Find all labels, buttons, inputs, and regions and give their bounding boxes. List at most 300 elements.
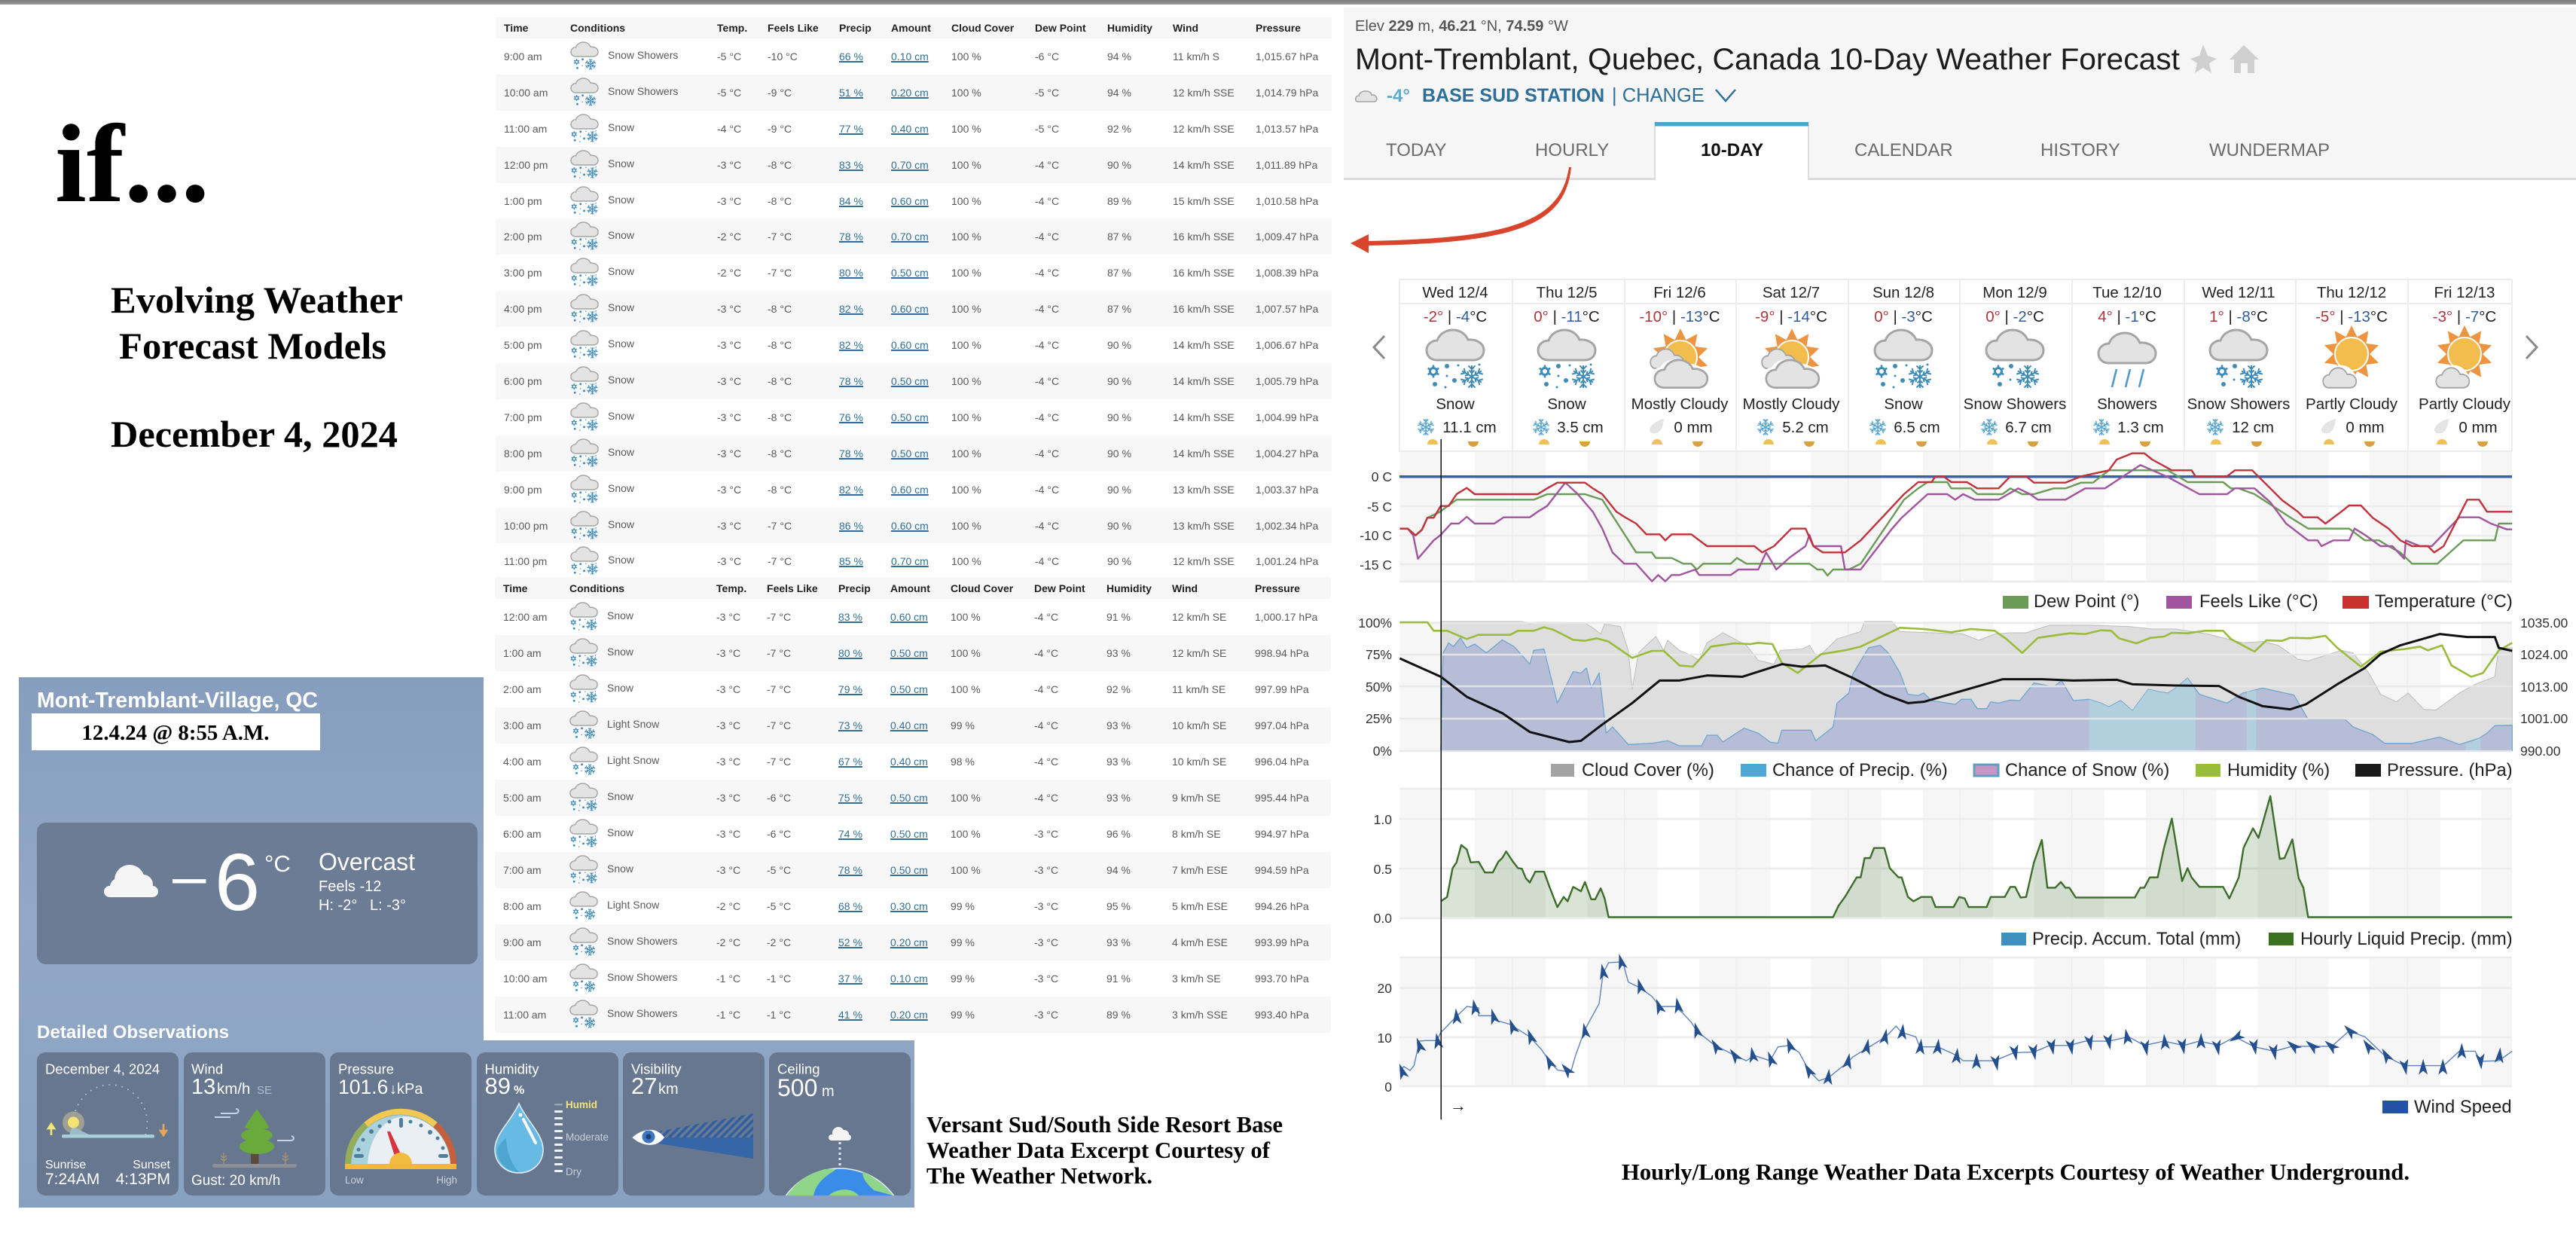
table header row: 85 % (839, 555, 863, 567)
chart: cloud cover, precipitation, humidity and pressure: 25% (1366, 711, 1392, 726)
table header row: 1,002.34 hPa (1256, 520, 1318, 532)
table header row: 90 % (1107, 339, 1131, 351)
table header row: 74 % (838, 828, 862, 840)
icon: earth with cloud ceiling (785, 1127, 895, 1196)
table header row: Snow Showers (607, 971, 677, 983)
table header row: 12 km/h SSE (1173, 123, 1235, 135)
table header row: 11:00 am (504, 123, 547, 135)
table header row: 16 km/h SSE (1173, 267, 1235, 279)
day: Wed 12/4: 11.1 cm (1442, 419, 1497, 436)
day: Fri 12/6: 0 mm (1674, 419, 1713, 436)
table header row: -5 °C (717, 87, 741, 99)
table header row: Snow (607, 863, 633, 875)
table header row: 997.99 hPa (1255, 683, 1309, 695)
icon: current wind arrow: → (1450, 1096, 1467, 1115)
table header row: 0.60 cm (891, 339, 929, 351)
day: Wed 12/4: -2° | -4°C (1424, 308, 1487, 325)
table header row: Pressure (1256, 22, 1301, 34)
table header row: -3 °C (717, 484, 741, 496)
card: wind: SE (257, 1084, 272, 1097)
humidity scale: Humid (566, 1099, 597, 1110)
table header row: 7:00 pm (504, 411, 542, 423)
series: wind direction arrows (1395, 953, 2504, 1085)
table header row: 14 km/h SSE (1173, 375, 1235, 387)
series: wind speed line (1399, 962, 2512, 1081)
series: pressure (1399, 634, 2512, 742)
table header row: -4 °C (1035, 555, 1059, 567)
table header row: 3 km/h SE (1172, 973, 1221, 985)
table header row: 5:00 pm (504, 339, 542, 351)
table header row: 100 % (951, 303, 981, 315)
card: wind: 13 (191, 1075, 215, 1099)
humidity scale (554, 1099, 609, 1177)
panel: current conditions, The Weather Network (19, 677, 914, 1208)
table header row: 73 % (838, 719, 862, 731)
table header row: 3:00 pm (504, 267, 542, 279)
table header row: 99 % (951, 900, 975, 912)
table header row: -8 °C (768, 159, 792, 171)
table header row: -5 °C (1035, 87, 1059, 99)
table header row: -1 °C (716, 1009, 740, 1021)
card: wind: km/h (217, 1080, 250, 1098)
table header row: 100 % (951, 267, 981, 279)
table header row: -4 °C (1035, 267, 1059, 279)
table header row: -2 °C (717, 231, 741, 243)
table header row: 11 km/h S (1173, 50, 1219, 63)
humidity scale: Moderate (566, 1131, 609, 1143)
table header row: 13 km/h SSE (1173, 520, 1235, 532)
chart: cloud cover, precipitation, humidity and pressure: 1024.00 (2520, 647, 2568, 662)
day: Mon 12/9: 0° | -2°C (1985, 308, 2044, 325)
table header row (504, 22, 1318, 575)
series: feels like (1399, 465, 2512, 582)
table header row: -7 °C (767, 611, 791, 623)
table header row: 100 % (951, 792, 981, 804)
table header row: -8 °C (768, 375, 792, 387)
day: Mon 12/9: Snow Showers (1964, 395, 2066, 413)
table header row: 91 % (1106, 611, 1131, 623)
table header row: Snow (608, 193, 634, 205)
table header row: 11:00 pm (504, 555, 547, 567)
card: sunrise and sunset: Sunset (133, 1159, 171, 1171)
table header row: 0.70 cm (891, 159, 929, 171)
table header row: -8 °C (768, 339, 792, 351)
table header row: -4 °C (717, 123, 741, 135)
day: Thu 12/12: -5° | -13°C (2315, 308, 2388, 325)
table header row: -3 °C (716, 828, 740, 840)
current time marker line (1440, 439, 1442, 1119)
chart: hourly liquid precipitation: 1.0 (1374, 812, 1392, 827)
table header row: 89 % (1106, 1009, 1131, 1021)
heading: Evolving Weather Forecast Models: Forecast Models (119, 325, 386, 367)
table header row: Snow (608, 410, 634, 422)
caption: Weather Underground credit: Hourly/Long Range Weather Data Excerpts Courtesy of Weather Underground. (1622, 1159, 2410, 1185)
arrow: previous day (1374, 336, 1384, 359)
table header row: -8 °C (768, 303, 792, 315)
table header row: 100 % (951, 828, 981, 840)
day: Wed 12/4: Wed 12/4 (1422, 284, 1488, 301)
series: dew point (1399, 470, 2512, 576)
chart: wind speed: 0 (1384, 1080, 1392, 1095)
table header row: 1,014.79 hPa (1256, 87, 1318, 99)
table header row: 100 % (951, 87, 981, 99)
table header row: 93 % (1106, 792, 1131, 804)
table header row: 90 % (1107, 375, 1131, 387)
table header row: 12 km/h SE (1172, 611, 1226, 623)
table header row: 90 % (1107, 555, 1131, 567)
table header row: 1,003.37 hPa (1256, 484, 1318, 496)
table header row: 1,006.67 hPa (1256, 339, 1318, 351)
table header row: -6 °C (767, 828, 791, 840)
table header row: -4 °C (1035, 375, 1059, 387)
table header row: 82 % (839, 484, 863, 496)
table header row: -3 °C (717, 303, 741, 315)
card: humidity: % (514, 1084, 524, 1097)
table header row: Snow (607, 826, 633, 838)
table header row: 100 % (951, 520, 981, 532)
table header row: Snow (607, 682, 633, 694)
table header row: -4 °C (1034, 719, 1058, 731)
table header row: 0.50 cm (890, 647, 928, 659)
table header row: -3 °C (716, 683, 740, 695)
table header row: 13 km/h SSE (1173, 484, 1235, 496)
heading: Evolving Weather Forecast Models: Evolving Weather (111, 279, 403, 321)
table header row: 1,000.17 hPa (1255, 611, 1317, 623)
table header row: 2:00 pm (504, 231, 542, 243)
table header row: Snow Showers (608, 85, 678, 97)
table header row: 99 % (951, 719, 975, 731)
table header row: -5 °C (767, 900, 791, 912)
table header row: -4 °C (1035, 194, 1059, 206)
navigation tabs: TODAY (1386, 140, 1446, 160)
table header row: 67 % (838, 756, 862, 768)
table header row: 4:00 pm (504, 303, 542, 315)
table header row: 9:00 am (503, 936, 542, 948)
table header row: 100 % (951, 555, 981, 567)
table header row: 79 % (838, 683, 862, 695)
table header row: 0.20 cm (890, 936, 928, 948)
table header row: 3 km/h SSE (1172, 1009, 1228, 1021)
table header row: 0.70 cm (891, 231, 929, 243)
table header row: -3 °C (716, 611, 740, 623)
table header row: 10:00 pm (504, 520, 548, 532)
chart: temperature, feels like and dew point: 0 C (1372, 469, 1392, 484)
table header row: 1:00 pm (504, 194, 542, 206)
table header row: 87 % (1107, 303, 1131, 315)
day: Sun 12/8 (1869, 284, 1940, 447)
table header row: -3 °C (716, 756, 740, 768)
table header row: 93 % (1106, 756, 1131, 768)
table header row: 6:00 pm (504, 375, 542, 387)
title: if...: if... (55, 102, 209, 226)
table header row: -5 °C (1035, 123, 1059, 135)
table header row: -4 °C (1034, 792, 1058, 804)
card: pressure: High (436, 1174, 457, 1186)
table header row: 14 km/h SSE (1173, 447, 1235, 460)
day: Sat 12/7 (1743, 284, 1840, 447)
table header row: 10 km/h SE (1172, 719, 1226, 731)
table header row: 10:00 am (504, 87, 548, 99)
table header row: 83 % (838, 611, 862, 623)
table header row: 92 % (1107, 123, 1131, 135)
top grey strip (0, 0, 2576, 5)
day: Thu 12/12: 0 mm (2346, 419, 2385, 436)
table header row: 78 % (839, 375, 863, 387)
station name: Mont-Tremblant-Village, QC (37, 689, 318, 713)
table header row: -3 °C (716, 792, 740, 804)
table header row: -2 °C (767, 936, 791, 948)
icon: pressure gauge (345, 1112, 456, 1169)
table header row: 9:00 am (504, 50, 542, 63)
day: Thu 12/12 (2306, 284, 2398, 447)
legend: cloud and pressure chart: Cloud Cover (%) (1582, 760, 1714, 780)
card: pressure: ↓kPa (389, 1081, 423, 1098)
navigation tabs: HISTORY (2040, 140, 2120, 160)
table header row: 9:00 pm (504, 484, 542, 496)
table header row: -4 °C (1035, 484, 1059, 496)
table header row: 1,001.24 hPa (1256, 555, 1318, 567)
legend: precipitation chart: Hourly Liquid Precip. (mm) (2300, 929, 2513, 949)
table header row: 0.20 cm (890, 1009, 928, 1021)
table header row: -7 °C (767, 719, 791, 731)
table header row: 0.20 cm (891, 87, 929, 99)
legend: cloud and pressure chart (1551, 760, 2513, 780)
table header row: Snow Showers (607, 1007, 677, 1019)
conditions text: H: -2° L: -3° (319, 897, 406, 914)
day: Thu 12/5 (1533, 284, 1604, 447)
table header row: 93 % (1106, 647, 1131, 659)
table header row: -5 °C (767, 864, 791, 876)
table header row: 96 % (1106, 828, 1131, 840)
table header row: 8:00 pm (504, 447, 542, 460)
table header row: 100 % (951, 447, 981, 460)
table header row: Light Snow (607, 718, 659, 730)
table header row: Snow (607, 790, 633, 802)
table header row: Time (504, 22, 528, 34)
table header row: 996.04 hPa (1255, 756, 1309, 768)
day: Thu 12/5: 0° | -11°C (1534, 308, 1600, 325)
table header row: 1,011.89 hPa (1256, 159, 1317, 171)
table header row: -4 °C (1035, 231, 1059, 243)
table header row: -3 °C (717, 194, 741, 206)
table header row: Amount (891, 22, 931, 34)
table header row: 995.44 hPa (1255, 792, 1309, 804)
table header row: 4 km/h ESE (1172, 936, 1228, 948)
day: Sun 12/8: Snow (1884, 395, 1923, 413)
timestamp box: 12.4.24 @ 8:55 A.M. (81, 722, 270, 745)
table header row: -4 °C (1035, 303, 1059, 315)
table header row: 1,009.47 hPa (1256, 231, 1318, 243)
page title: Mont-Tremblant, Quebec, Canada 10-Day Weather Forecast (1355, 43, 2180, 76)
chart: cloud cover, precipitation, humidity and pressure: 100% (1358, 615, 1392, 631)
card: sunrise and sunset: 7:24AM (45, 1171, 99, 1188)
table header row: -3 °C (1034, 936, 1058, 948)
table header row: 100 % (951, 611, 981, 623)
legend: cloud and pressure chart: Humidity (%) (2227, 760, 2330, 780)
card: current temperature (37, 823, 478, 964)
navigation tabs: WUNDERMAP (2209, 140, 2330, 160)
day: Tue 12/10: Showers (2097, 395, 2157, 413)
chart: hourly liquid precipitation: 0.5 (1374, 862, 1392, 877)
table header row: 0.10 cm (890, 973, 928, 985)
table header row: Precip (839, 22, 871, 34)
table header row: Snow (608, 482, 634, 494)
day: Sun 12/8: Sun 12/8 (1872, 284, 1934, 301)
table header row: 100 % (951, 375, 981, 387)
table header row: 8:00 am (503, 900, 542, 912)
icon: eye with sight beam (633, 1113, 753, 1159)
table header row: Snow (608, 554, 634, 566)
day: Mon 12/9 (1964, 284, 2066, 447)
table header row: 993.99 hPa (1255, 936, 1309, 948)
day: Tue 12/10 (2092, 284, 2164, 447)
table header row: -3 °C (717, 447, 741, 460)
table header row: 6:00 am (503, 828, 542, 840)
day: Mon 12/9: 6.7 cm (2005, 419, 2052, 436)
legend: wind speed: Wind Speed (2414, 1097, 2512, 1117)
table header row: 14 km/h SSE (1173, 411, 1235, 423)
table header row: 1,008.39 hPa (1256, 267, 1318, 279)
card: wind (184, 1052, 325, 1196)
table header row: 11 km/h SE (1172, 683, 1225, 695)
day: Fri 12/6 (1631, 284, 1729, 447)
day: Sat 12/7: -9° | -14°C (1755, 308, 1827, 325)
table header row: Snow (607, 646, 633, 658)
series: cloud cover (1441, 621, 2512, 751)
table header row: -7 °C (767, 683, 791, 695)
table header row: 0.60 cm (891, 484, 929, 496)
table header row: -6 °C (767, 792, 791, 804)
chart: cloud cover, precipitation, humidity and pressure: 1013.00 (2520, 679, 2568, 695)
table header row: 10 km/h SE (1172, 756, 1226, 768)
table header row: 12:00 am (503, 611, 547, 623)
table header row: -6 °C (1035, 50, 1059, 63)
card: ceiling: Ceiling (777, 1061, 820, 1077)
table header row: 99 % (951, 973, 975, 985)
station line: -4° (1387, 86, 1410, 106)
table header row: Light Snow (607, 754, 659, 766)
caption: The Weather Network credit: The Weather Network. (926, 1162, 1152, 1189)
table header row: Dew Point (1035, 22, 1086, 34)
table header row: 7:00 am (503, 864, 542, 876)
table header row: 93 % (1106, 719, 1131, 731)
table header row: Cloud Cover (951, 22, 1014, 34)
day: Fri 12/13: Fri 12/13 (2434, 284, 2495, 301)
table header row: -4 °C (1035, 159, 1059, 171)
day: Fri 12/6: Fri 12/6 (1653, 284, 1706, 301)
table header row: 12:00 pm (504, 159, 548, 171)
table header row: 11:00 am (503, 1009, 546, 1021)
table header row: 5 km/h ESE (1172, 900, 1228, 912)
table header row: 8 km/h SE (1172, 828, 1221, 840)
card: sunrise and sunset: December 4, 2024 (45, 1061, 160, 1077)
table header row: 0.50 cm (890, 864, 928, 876)
table header row: Temp. (717, 22, 747, 34)
card: humidity: 89 (485, 1073, 511, 1099)
table header row: 83 % (839, 159, 863, 171)
table header row: -4 °C (1034, 611, 1058, 623)
table header row: 90 % (1107, 484, 1131, 496)
table header row: Amount (890, 582, 930, 594)
table header row: -10 °C (768, 50, 798, 63)
table header row: Cloud Cover (951, 582, 1013, 594)
chart: cloud cover, precipitation, humidity and pressure: 1035.00 (2520, 615, 2568, 631)
table header row: 1,010.58 hPa (1256, 194, 1318, 206)
table header row: 93 % (1106, 936, 1131, 948)
day: Wed 12/4 (1418, 284, 1497, 447)
table header row: 0.50 cm (891, 375, 929, 387)
table header row: Dew Point (1034, 582, 1085, 594)
day: Wed 12/11: Wed 12/11 (2202, 284, 2275, 301)
table header row: -4 °C (1034, 756, 1058, 768)
day: Sun 12/8: 0° | -3°C (1874, 308, 1933, 325)
table header row: 78 % (839, 447, 863, 460)
table header row: -3 °C (717, 375, 741, 387)
table header row: 9 km/h SE (1172, 792, 1221, 804)
table header row: 0.60 cm (891, 520, 929, 532)
table header row: 78 % (838, 864, 862, 876)
table header row: 993.40 hPa (1255, 1009, 1309, 1021)
table header row: 1,007.57 hPa (1256, 303, 1318, 315)
day: Thu 12/5: 3.5 cm (1557, 419, 1604, 436)
legend: temperature chart (2003, 591, 2513, 612)
day: Thu 12/5: Thu 12/5 (1537, 284, 1597, 301)
series: chance of snow (1441, 638, 2512, 751)
day: Tue 12/10: 1.3 cm (2117, 419, 2164, 436)
table header row: -5 °C (717, 50, 741, 63)
table header row: 0.50 cm (891, 411, 929, 423)
table header row: Snow (608, 121, 634, 133)
temperature value: – (172, 842, 206, 909)
table header row: Humidity (1107, 22, 1152, 34)
card: ceiling (769, 1052, 911, 1196)
table header row (503, 582, 1318, 1028)
table header row: 15 km/h SSE (1173, 194, 1235, 206)
day: Fri 12/13: Partly Cloudy (2419, 395, 2511, 413)
table header row: -1 °C (767, 973, 791, 985)
table header row: 16 km/h SSE (1173, 231, 1235, 243)
table header row: 1,004.27 hPa (1256, 447, 1318, 460)
table header row: -1 °C (767, 1009, 791, 1021)
table header row: -3 °C (716, 647, 740, 659)
legend: precipitation chart: Precip. Accum. Total (mm) (2032, 929, 2241, 949)
table header row: 100 % (951, 159, 981, 171)
table header row: 14 km/h SSE (1173, 159, 1235, 171)
panel: 10-day forecast strip (1374, 279, 2537, 451)
table header row: 994.97 hPa (1255, 828, 1309, 840)
series: temperature (1399, 453, 2512, 552)
table header row: -4 °C (1035, 447, 1059, 460)
table header row: Time (503, 582, 527, 594)
table header row: Snow (608, 446, 634, 458)
chart: temperature, feels like and dew point (1360, 452, 2512, 582)
table header row: 5:00 am (503, 792, 542, 804)
table header row: -7 °C (768, 520, 792, 532)
card: visibility: 27 (631, 1073, 657, 1099)
table header row: -3 °C (717, 339, 741, 351)
chart: wind speed (1378, 953, 2512, 1095)
day: Wed 12/11: 12 cm (2232, 419, 2274, 436)
table header row: 66 % (839, 50, 863, 63)
table header row: 0.10 cm (891, 50, 929, 63)
icon: sun path (48, 1085, 166, 1138)
day: Fri 12/13: 0 mm (2458, 419, 2498, 436)
table header row: 2:00 am (503, 683, 542, 695)
table header row: -8 °C (768, 194, 792, 206)
table header row: -4 °C (1034, 683, 1058, 695)
table header row: 92 % (1106, 683, 1131, 695)
table header row: 37 % (838, 973, 862, 985)
